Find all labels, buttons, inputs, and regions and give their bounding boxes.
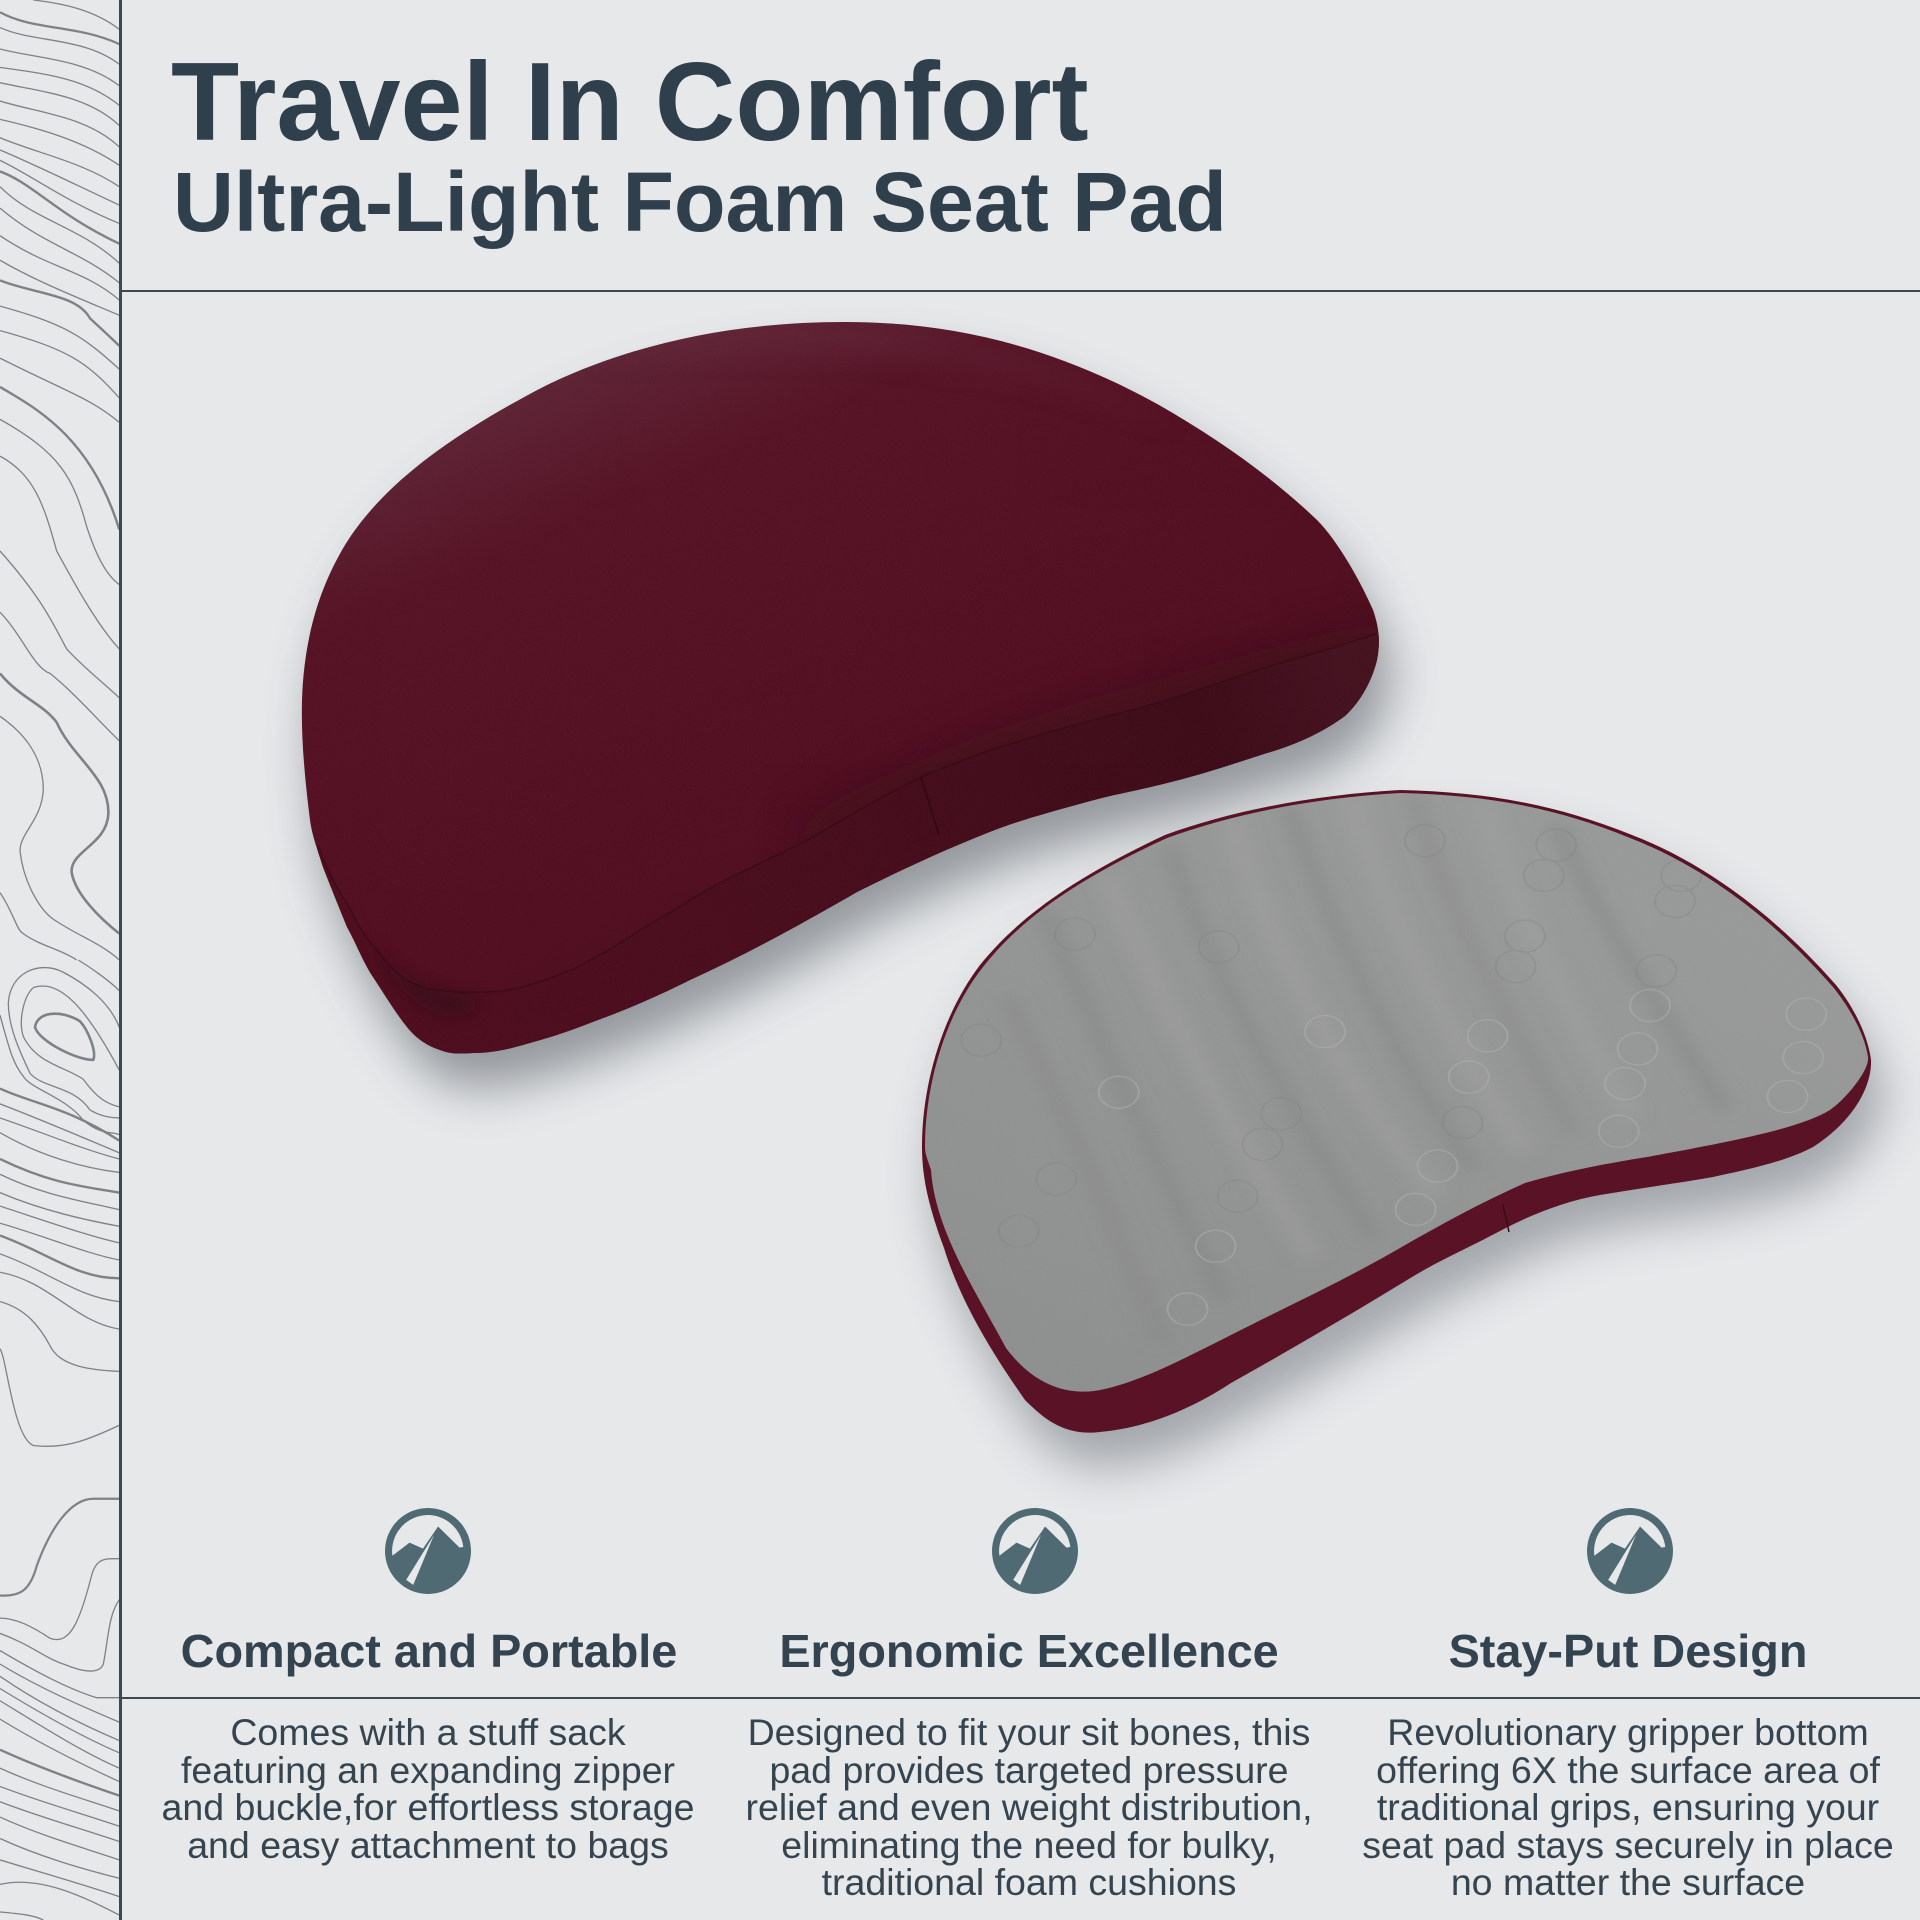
heading: Ergonomic Excellence: Ergonomic Excellence	[779, 1625, 1279, 1677]
burgundy pad, top view	[280, 300, 1400, 1100]
text: compact and portable description: featuring an expanding zipper	[181, 1748, 675, 1790]
text: ergonomic excellence description	[745, 1711, 1312, 1903]
gripper pad shadow	[934, 824, 1883, 1467]
gripper surface	[925, 793, 1868, 1392]
left vertical rule	[119, 0, 122, 1920]
product illustration: two seat pads	[284, 322, 1908, 1492]
dark folds near lower-left seam	[390, 964, 474, 1016]
icon: mountain badge, column 1	[385, 1508, 471, 1594]
gripper pad burgundy base	[922, 790, 1871, 1433]
text: stay-put design description: Revolutionary gripper bottom	[1387, 1711, 1869, 1753]
background pattern: topographic contour lines	[0, 0, 119, 1920]
pad shadow	[314, 356, 1391, 1088]
pad fabric grain	[280, 300, 1400, 1080]
text: compact and portable description: and easy attachment to bags	[187, 1824, 669, 1866]
icon: mountain badge, column 3	[1587, 1508, 1673, 1594]
text: stay-put design description: traditional grips, ensuring your	[1377, 1786, 1879, 1828]
icon: mountain badge, column 2	[992, 1508, 1078, 1594]
heading: Compact and Portable: Compact and Portable	[181, 1625, 677, 1677]
gripper fabric grain	[900, 780, 1900, 1460]
text: ergonomic excellence description: pad provides targeted pressure	[769, 1748, 1289, 1790]
text: stay-put design description: seat pad stays securely in place	[1362, 1824, 1894, 1866]
text: compact and portable description: Comes with a stuff sack	[230, 1711, 626, 1753]
shaded band above seam	[816, 631, 1362, 830]
text: ergonomic excellence description: eliminating the need for bulky,	[781, 1824, 1277, 1866]
header divider rule	[120, 290, 1920, 292]
subtitle: Ultra-Light Foam Seat Pad	[173, 155, 1227, 249]
grey gripper pad, underside view	[900, 780, 1900, 1467]
text: stay-put design description: offering 6X the surface area of	[1376, 1748, 1880, 1790]
text: stay-put design description: no matter the surface	[1451, 1861, 1805, 1903]
gripper pad side seam	[1503, 1205, 1509, 1232]
text: ergonomic excellence description: relief and even weight distribution,	[745, 1786, 1312, 1828]
text: compact and portable description	[162, 1711, 694, 1866]
text: stay-put design description	[1362, 1711, 1894, 1903]
text: ergonomic excellence description: traditional foam cushions	[822, 1861, 1236, 1903]
title: Travel In Comfort	[171, 39, 1089, 164]
text: ergonomic excellence description: Designed to fit your sit bones, this	[748, 1711, 1310, 1753]
pad seam	[318, 633, 1377, 992]
heading: Stay-Put Design: Stay-Put Design	[1449, 1625, 1807, 1677]
pad body	[302, 322, 1379, 1054]
pad side wall below seam	[318, 634, 1379, 1054]
text: compact and portable description: and buckle,for effortless storage	[162, 1786, 694, 1828]
features divider rule	[120, 1697, 1920, 1699]
